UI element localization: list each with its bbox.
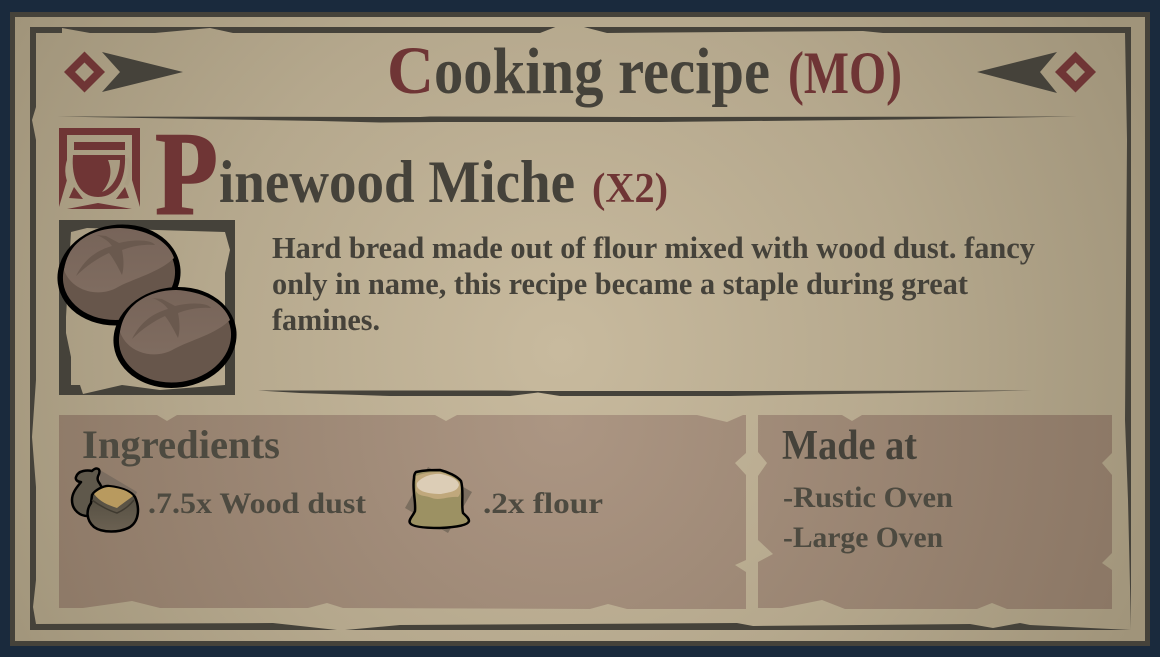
icon: flour sack: [405, 467, 472, 533]
picture frame with bread: [54, 220, 240, 395]
icon: cooking pot: [59, 128, 140, 209]
list item: large oven: -Large Oven: [783, 521, 943, 554]
description: Hard bread made out of flour mixed with wood dust. fancy: [272, 230, 1035, 265]
recipe name: P: [155, 107, 218, 240]
icon: front loaf: [110, 282, 240, 393]
icon: back loaf: [54, 220, 184, 330]
header ornament left: [64, 52, 183, 92]
picture frame: [59, 220, 235, 395]
title: (MO): [788, 40, 902, 106]
title: ooking recipe: [434, 35, 770, 108]
panel: ingredients: [59, 415, 746, 609]
description: [272, 230, 1035, 337]
icon: wood dust sacks: [72, 469, 138, 532]
description: only in name, this recipe became a staple during great: [272, 266, 969, 301]
heading: ingredients: Ingredients: [82, 422, 280, 467]
recipe name: [155, 107, 668, 240]
recipe name: (X2): [592, 166, 668, 212]
title: C: [387, 32, 434, 108]
lower divider: [258, 390, 1032, 396]
item: wood dust: .7.5x Wood dust: [148, 487, 366, 520]
description: famines.: [272, 302, 380, 337]
list item: rustic oven: -Rustic Oven: [783, 481, 953, 514]
item: flour: .2x flour: [483, 487, 603, 520]
header ornament right: [977, 52, 1096, 93]
panel: made at: [758, 415, 1112, 609]
heading: made at: Made at: [782, 423, 917, 469]
recipe name: inewood Miche: [219, 149, 575, 215]
header divider: [57, 116, 1077, 122]
